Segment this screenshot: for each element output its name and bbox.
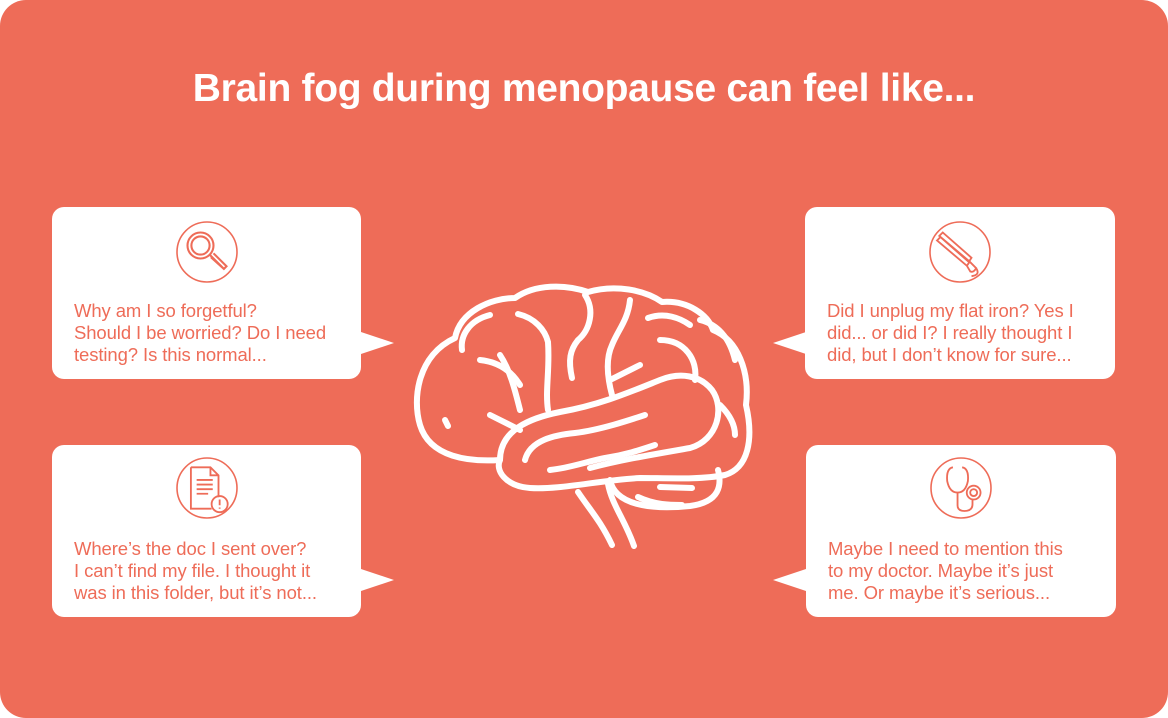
text: flat iron: did... or did I? I really thought I <box>827 322 1072 343</box>
brainstem <box>578 492 612 545</box>
title: Brain fog during menopause can feel like... <box>193 67 975 110</box>
text: lost document: was in this folder, but it’s not... <box>74 582 317 603</box>
text: flat iron: Did I unplug my flat iron? Yes I <box>827 300 1074 321</box>
text: doctor: to my doctor. Maybe it’s just <box>828 560 1053 581</box>
panel: doctor <box>806 445 1116 617</box>
text: forgetful: Should I be worried? Do I need <box>74 322 326 343</box>
text: lost document: Where’s the doc I sent over? <box>74 538 306 559</box>
text: doctor: me. Or maybe it’s serious... <box>828 582 1050 603</box>
text: forgetful <box>74 300 326 365</box>
icon: document alert <box>176 457 238 519</box>
text: lost document <box>74 538 317 603</box>
panel: forgetful <box>52 207 361 379</box>
icon: magnifying glass <box>176 221 238 283</box>
panel: lost document <box>52 445 361 617</box>
text: forgetful: Why am I so forgetful? <box>74 300 257 321</box>
sulci <box>518 314 548 410</box>
cerebellum <box>610 470 720 507</box>
text: flat iron <box>827 300 1074 365</box>
text: flat iron: did, but I don’t know for sure... <box>827 344 1072 365</box>
text: forgetful: testing? Is this normal... <box>74 344 267 365</box>
icon: stethoscope <box>930 457 992 519</box>
text: doctor: Maybe I need to mention this <box>828 538 1063 559</box>
temporal lobe <box>500 376 718 468</box>
icon: flat iron <box>929 221 991 283</box>
text: doctor <box>828 538 1063 603</box>
text: lost document: I can’t find my file. I thought it <box>74 560 310 581</box>
cerebrum outline <box>417 287 749 488</box>
panel: flat iron <box>805 207 1115 379</box>
